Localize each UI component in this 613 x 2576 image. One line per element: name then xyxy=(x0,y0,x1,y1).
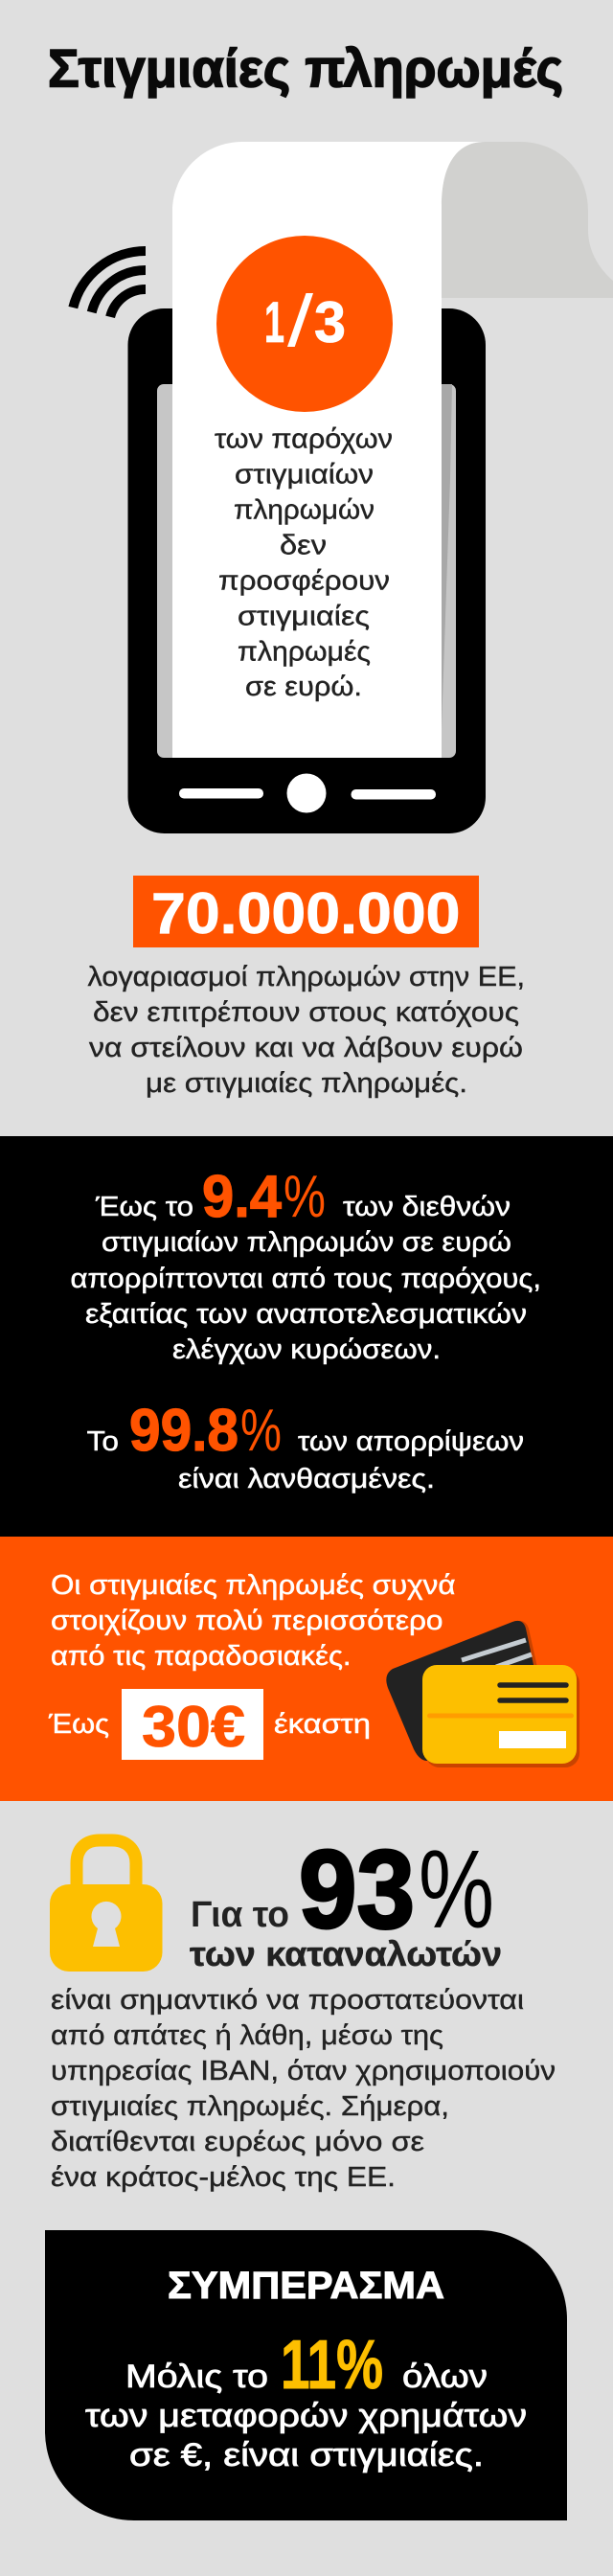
text: accounts description: να στείλουν και να λάβουν ευρώ xyxy=(89,1033,523,1063)
receipt paper xyxy=(172,142,485,758)
receipt text: πληρωμών xyxy=(234,495,375,526)
text: 9.4 percent: των διεθνών xyxy=(343,1192,511,1222)
circle: one third: 1 xyxy=(264,290,284,354)
heading: conclusion: ΣΥΜΠΕΡΑΣΜΑ xyxy=(168,2265,444,2307)
text: up to 30 euro each xyxy=(48,1689,371,1760)
screen shadow xyxy=(442,384,452,728)
panel: conclusion xyxy=(45,2230,567,2520)
icon: payment cards xyxy=(386,1621,579,1767)
text: accounts description: με στιγμιαίες πληρωμές. xyxy=(146,1068,467,1099)
paper curl xyxy=(442,142,613,298)
text: 99.8 percent: είναι λανθασμένες. xyxy=(178,1464,435,1494)
phone body xyxy=(128,308,486,833)
text: up to 30 euro each: έκαστη xyxy=(274,1709,371,1740)
icon: smartphone with receipt xyxy=(73,142,613,833)
circle: one third: 3 xyxy=(314,290,346,354)
heading: 93 percent of consumers: των καταναλωτών xyxy=(190,1934,502,1973)
text: 9.4 percent: απορρίπτονται από τους παρόχους, xyxy=(71,1264,541,1294)
text: 9.4 percent: Έως το xyxy=(95,1192,193,1222)
text: 99.8 percent: Το xyxy=(87,1426,119,1457)
text: 99.8 percent: 99.8 xyxy=(129,1398,238,1464)
text: up to 30 euro each: 30€ xyxy=(142,1695,245,1759)
text: up to 30 euro each: Έως xyxy=(48,1709,109,1740)
heading: 93 percent of consumers: % xyxy=(419,1827,494,1951)
receipt text: δεν xyxy=(280,531,327,561)
receipt text: των παρόχων xyxy=(215,423,393,454)
circle: one third: / xyxy=(287,281,314,362)
text: consumer protection: υπηρεσίας ΙΒΑΝ, όταν χρησιμοποιούν xyxy=(51,2056,556,2086)
text: 11 percent conclusion: των μεταφορών χρημάτων xyxy=(85,2398,527,2434)
text: accounts description: λογαριασμοί πληρωμών στην ΕΕ, xyxy=(88,962,525,992)
text: consumer protection: ένα κράτος-μέλος της ΕΕ. xyxy=(51,2162,396,2193)
text: cost description: από τις παραδοσιακές. xyxy=(51,1641,351,1672)
text: 9.4 percent: % xyxy=(284,1164,326,1230)
text: cost description xyxy=(51,1570,456,1672)
icon: wireless signal xyxy=(73,251,146,317)
receipt text xyxy=(215,423,393,702)
phone screen xyxy=(157,384,456,758)
text: cost description: Οι στιγμιαίες πληρωμές συχνά xyxy=(51,1570,456,1601)
phone buttons xyxy=(179,774,436,812)
text: 9.4 percent xyxy=(71,1164,541,1365)
icon: padlock xyxy=(50,1840,163,1972)
text: consumer protection: είναι σημαντικό να προστατεύονται xyxy=(51,1985,524,2016)
text: consumer protection: διατίθενται ευρέως μόνο σε xyxy=(51,2127,424,2157)
receipt text: στιγμιαίων xyxy=(235,460,374,490)
panel: cost xyxy=(0,1537,613,1801)
text: cost description: στοιχίζουν πολύ περισσότερο xyxy=(51,1606,443,1636)
text: 9.4 percent: στιγμιαίων πληρωμών σε ευρώ xyxy=(102,1227,511,1258)
text: 99.8 percent xyxy=(87,1398,524,1494)
heading: 93 percent of consumers xyxy=(190,1827,502,1973)
text: 9.4 percent: ελέγχων κυρώσεων. xyxy=(172,1334,441,1365)
text: 11 percent conclusion: 11% xyxy=(281,2327,383,2404)
title: Στιγμιαίες πληρωμές xyxy=(48,38,563,98)
text: 11 percent conclusion xyxy=(85,2327,527,2473)
receipt text: σε ευρώ. xyxy=(245,672,362,702)
text: accounts description xyxy=(88,962,525,1099)
panel: rejections xyxy=(0,1136,613,1537)
stat: 70 million accounts: 70.000.000 xyxy=(151,881,460,946)
text: accounts description: δεν επιτρέπουν στους κατόχους xyxy=(93,997,519,1028)
text: 99.8 percent: % xyxy=(240,1398,282,1464)
receipt text: πληρωμές xyxy=(238,636,371,667)
receipt text: προσφέρουν xyxy=(218,565,390,596)
heading: 93 percent of consumers: 93 xyxy=(299,1827,415,1951)
receipt text: στιγμιαίες xyxy=(238,601,370,631)
heading: 93 percent of consumers: Για το xyxy=(191,1895,289,1935)
text: 99.8 percent: των απορρίψεων xyxy=(298,1426,524,1457)
text: 9.4 percent: 9.4 xyxy=(202,1164,282,1230)
text: consumer protection: στιγμιαίες πληρωμές. Σήμερα, xyxy=(51,2091,449,2122)
text: 11 percent conclusion: όλων xyxy=(402,2359,488,2395)
circle: one third xyxy=(216,236,393,412)
text: 11 percent conclusion: Μόλις το xyxy=(125,2359,268,2395)
text: 9.4 percent: εξαιτίας των αναποτελεσματικών xyxy=(85,1299,527,1330)
text: consumer protection: από απάτες ή λάθη, μέσω της xyxy=(51,2020,443,2051)
text: 11 percent conclusion: σε €, είναι στιγμιαίες. xyxy=(129,2437,484,2473)
text: consumer protection xyxy=(51,1985,556,2193)
